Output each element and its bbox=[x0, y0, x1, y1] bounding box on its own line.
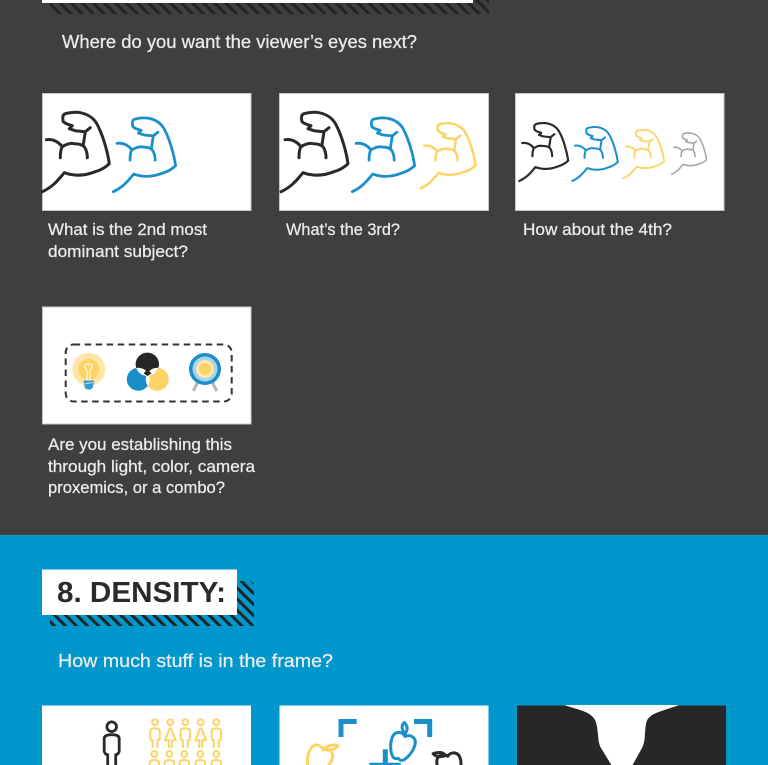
icon: black bicep bbox=[42, 112, 109, 192]
panel: faces silhouette bbox=[517, 705, 726, 765]
heading: 8. Density bbox=[42, 570, 254, 626]
icon: gray bicep bbox=[672, 133, 707, 174]
icon: blue bicep bbox=[572, 127, 618, 181]
caption: 2nd most dominant subject: What is the 2nd most bbox=[48, 220, 207, 239]
caption: light, color, camera: through light, color, camera bbox=[48, 457, 256, 476]
icon: yellow crowd bbox=[150, 719, 221, 765]
white negative space between faces bbox=[564, 705, 679, 765]
heading bar: previous section bbox=[42, 0, 489, 14]
panel: blue section background bbox=[0, 535, 768, 765]
panel: light, color, camera icons bbox=[42, 307, 251, 424]
caption: 2nd most dominant subject bbox=[48, 220, 207, 261]
panel: apples in framing brackets bbox=[280, 706, 488, 765]
icon: black bicep bbox=[519, 123, 568, 181]
icon: light bulb bbox=[72, 353, 105, 390]
icon: blue bicep bbox=[352, 118, 415, 192]
caption: light, color, camera: proxemics, or a combo? bbox=[48, 478, 225, 497]
dashed outline bbox=[66, 344, 232, 402]
icon: target on stand bbox=[189, 353, 221, 391]
panel: second most dominant subject bbox=[42, 94, 251, 210]
icon: yellow bicep bbox=[623, 130, 664, 178]
panel: dark section background bbox=[0, 0, 768, 535]
icon: blue bicep bbox=[113, 118, 176, 192]
panel: one person versus crowd bbox=[42, 706, 251, 765]
icon: blue apple bbox=[389, 721, 417, 762]
caption: light, color, camera bbox=[48, 435, 256, 497]
caption: the 4th: How about the 4th? bbox=[523, 220, 672, 239]
heading: 8. Density: 8. DENSITY: bbox=[57, 577, 226, 609]
panel: fourth subject bbox=[516, 94, 724, 210]
icon: black person bbox=[104, 722, 119, 765]
caption: the 3rd: What’s the 3rd? bbox=[286, 220, 400, 239]
icon: yellow apple bbox=[302, 743, 338, 765]
panel: third subject bbox=[280, 94, 488, 210]
icon: black bicep bbox=[281, 112, 348, 192]
icon: color venn diagram bbox=[127, 353, 169, 391]
icon: yellow bicep bbox=[421, 123, 476, 188]
caption: 2nd most dominant subject: dominant subject? bbox=[48, 242, 188, 261]
icon: black apple bbox=[432, 751, 462, 765]
icon: framing brackets and center mark bbox=[341, 722, 430, 765]
caption: light, color, camera: Are you establishing this bbox=[48, 435, 232, 454]
text: where do you want the viewer's eyes next: Where do you want the viewer’s eyes next? bbox=[62, 32, 417, 52]
text: how much stuff is in the frame: How much stuff is in the frame? bbox=[58, 651, 333, 671]
